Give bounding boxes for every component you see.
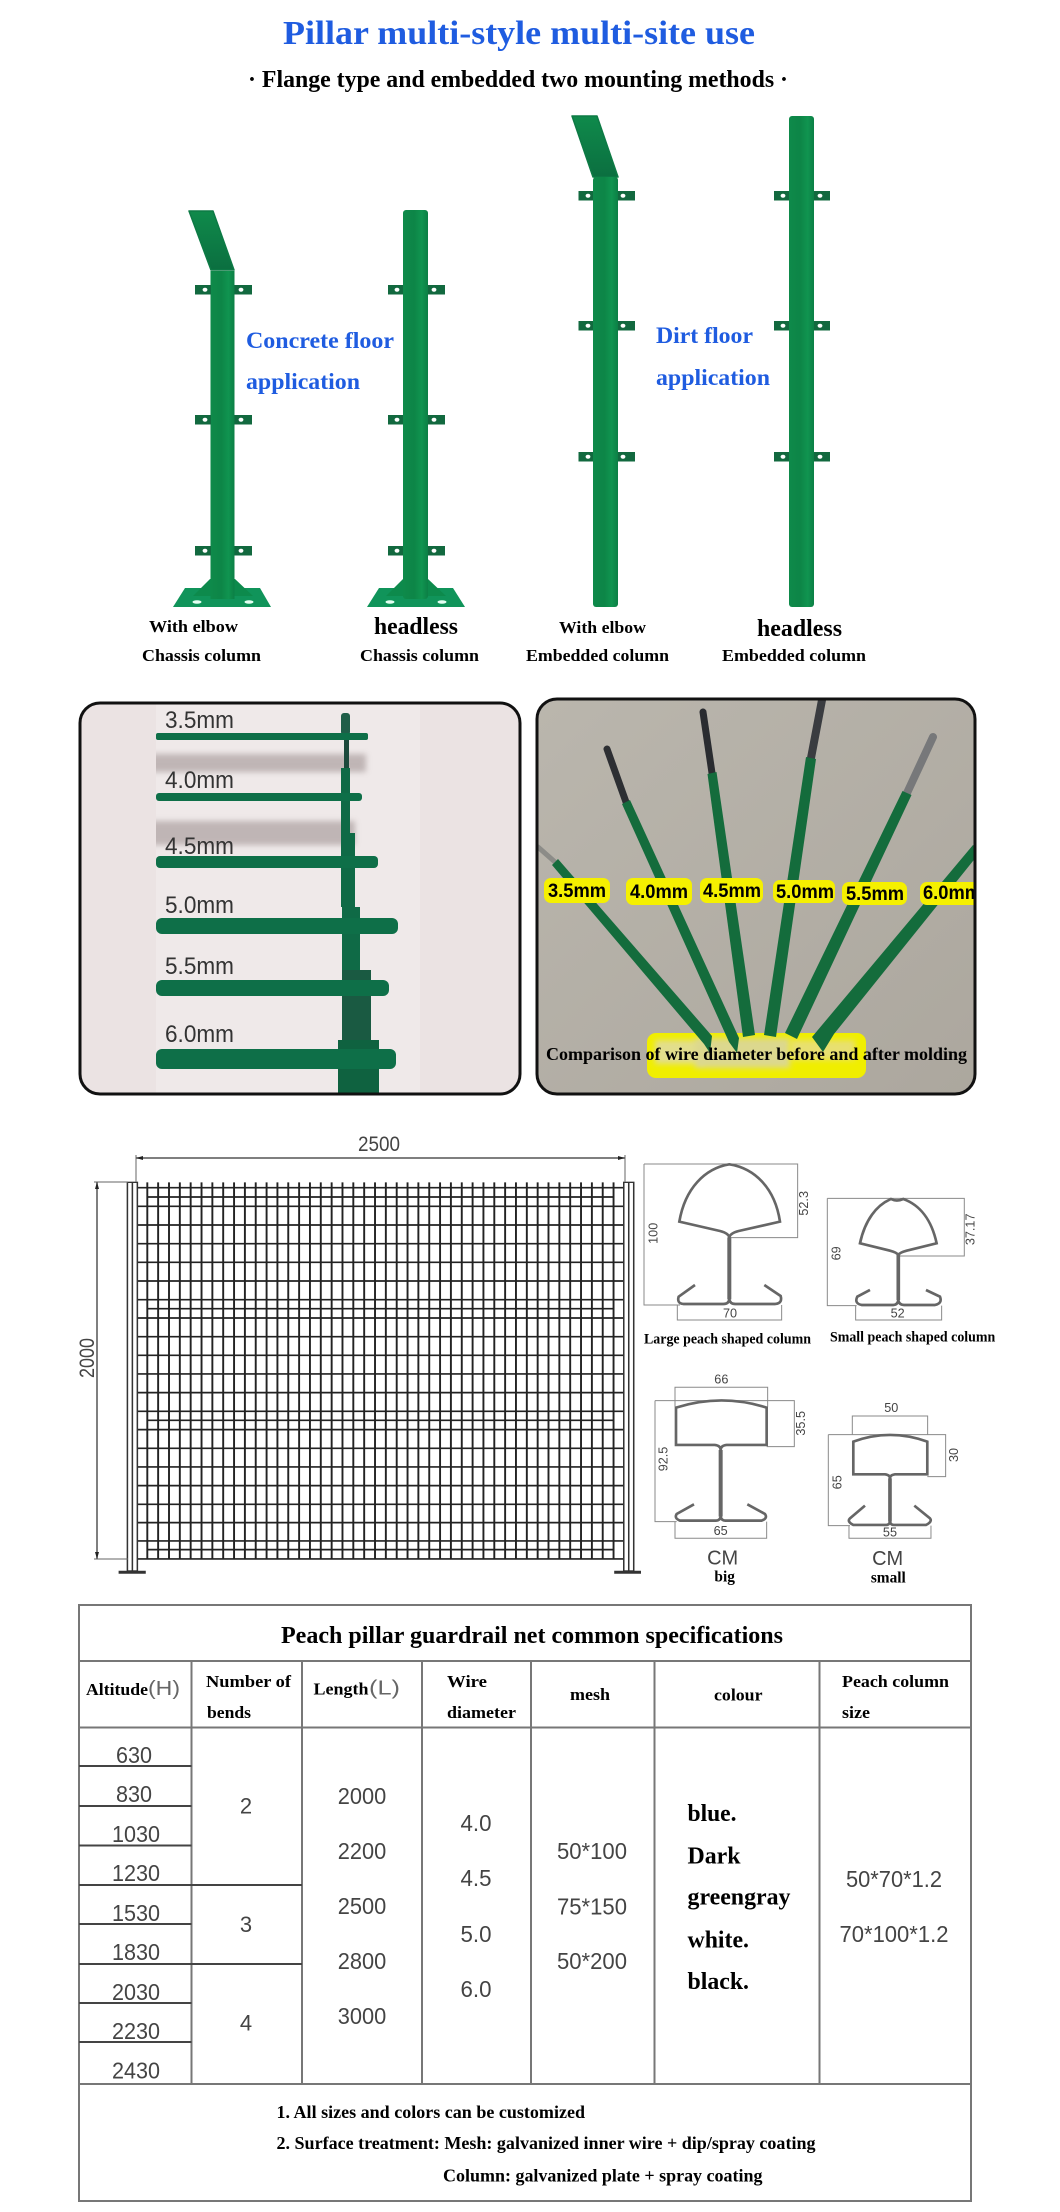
table title: Peach pillar guardrail net common specifications — [281, 1623, 783, 1649]
length column values: 2500 — [338, 1893, 386, 1919]
table header row: Number of — [206, 1672, 291, 1691]
panel: wire comparison before and after molding — [537, 699, 981, 1094]
section: small peach column: 69 — [830, 1246, 844, 1260]
caption: headless embedded column: headless — [757, 616, 842, 642]
altitude column values: 2030 — [112, 1979, 160, 2005]
caption: Comparison of wire diameter before and after molding — [546, 1044, 967, 1064]
table header row: Peach column — [842, 1672, 950, 1691]
green coated wires — [552, 757, 981, 1053]
yellow size tags: 4.0mm — [630, 882, 688, 903]
section: large peach column: 52.3 — [797, 1191, 811, 1216]
height dimension: 2000 — [76, 1338, 99, 1378]
yellow size tags — [544, 878, 981, 905]
column size values: 70*100*1.2 — [840, 1921, 948, 1947]
table header row: diameter — [447, 1703, 516, 1722]
table header row: Altitude — [86, 1680, 148, 1699]
panel: welded wire diameter samples — [80, 703, 520, 1094]
yellow size tags: 4.5mm — [703, 881, 761, 902]
caption: with elbow embedded column: With elbow — [559, 618, 647, 637]
caption: headless chassis column: Chassis column — [360, 646, 480, 665]
caption: with elbow chassis column: With elbow — [149, 617, 239, 636]
length column values: 2200 — [338, 1838, 386, 1864]
altitude column values: 1030 — [112, 1821, 160, 1847]
altitude column values: 2430 — [112, 2058, 160, 2084]
pillar: chassis column with elbow — [173, 211, 271, 607]
wire diameter column values: 5.0 — [460, 1921, 492, 1947]
length column values: 2800 — [338, 1948, 386, 1974]
wire diameter column values — [460, 1810, 492, 2002]
column size values: 50*70*1.2 — [846, 1866, 942, 1892]
length column values — [338, 1783, 386, 2029]
section: CM big column: 35.5 — [794, 1411, 808, 1436]
caption: with elbow embedded column — [526, 618, 670, 665]
table header row: bends — [207, 1703, 251, 1722]
section: CM big column — [655, 1373, 808, 1586]
altitude column values: 1530 — [112, 1900, 160, 1926]
wire size labels: 5.0mm — [165, 892, 234, 919]
section: CM big column: 65 — [714, 1524, 728, 1538]
label: dirt floor application: application — [656, 365, 770, 390]
section: CM small column — [828, 1401, 961, 1586]
label: dirt floor application — [656, 323, 770, 390]
table header row: Length — [314, 1680, 369, 1698]
section: CM big column: big — [714, 1569, 735, 1586]
mesh column values — [557, 1838, 627, 1974]
yellow size tags: 5.5mm — [846, 884, 904, 905]
caption: with elbow chassis column: Chassis column — [142, 646, 262, 665]
section: small peach column: 52 — [891, 1307, 905, 1321]
table header row: colour — [714, 1686, 763, 1704]
altitude column values: 1230 — [112, 1860, 160, 1886]
wire diameter column values: 4.0 — [460, 1810, 492, 1836]
altitude column values: 1830 — [112, 1939, 160, 1965]
mesh column values: 50*100 — [557, 1838, 627, 1864]
width dimension — [136, 1133, 625, 1182]
section: large peach column: 70 — [723, 1307, 737, 1321]
wire size labels: 6.0mm — [165, 1021, 234, 1048]
notes: 1. All sizes and colors can be customized — [276, 2102, 585, 2122]
table header row: (L) — [369, 1678, 400, 1700]
bends column values: 3 — [240, 1912, 252, 1937]
colour column values: blue. — [688, 1801, 736, 1827]
pillar: chassis column headless — [367, 210, 465, 607]
section: CM small column: small — [871, 1569, 906, 1586]
table header row: size — [842, 1703, 870, 1722]
height dimension — [76, 1182, 128, 1559]
colour column values: greengray — [688, 1884, 790, 1910]
wire diameter column values: 6.0 — [460, 1976, 492, 2002]
wire size labels: 4.5mm — [165, 833, 234, 860]
bare wire tips — [538, 700, 933, 862]
yellow size tags: 3.5mm — [548, 881, 606, 902]
pillar: embedded column with elbow — [572, 116, 635, 607]
caption: with elbow chassis column — [142, 617, 262, 665]
section: CM small column: 50 — [884, 1401, 898, 1415]
altitude column values — [112, 1742, 160, 2084]
fence panel dimension drawing — [76, 1133, 641, 1572]
wire size labels: 3.5mm — [165, 707, 234, 734]
mesh column values: 75*150 — [557, 1894, 627, 1920]
section: small peach column — [827, 1198, 995, 1346]
section: CM small column: CM — [872, 1548, 903, 1570]
colour column values: white. — [688, 1928, 749, 1954]
table header row: (H) — [148, 1678, 180, 1700]
section: CM big column: 66 — [714, 1373, 728, 1387]
section: CM small column: 65 — [830, 1475, 844, 1489]
table header row: Wire — [447, 1672, 487, 1691]
colour column values — [688, 1801, 790, 1995]
width dimension: 2500 — [358, 1133, 400, 1156]
title: Pillar multi-style multi-site use — [283, 15, 755, 52]
label: concrete floor application: application — [246, 369, 360, 394]
label: dirt floor application: Dirt floor — [656, 323, 753, 348]
bends column values: 2 — [240, 1794, 252, 1818]
altitude column values: 630 — [116, 1742, 152, 1768]
mesh column values: 50*200 — [557, 1948, 627, 1974]
section: small peach column: 37.17 — [964, 1213, 978, 1245]
fence posts — [119, 1182, 641, 1572]
fence mesh — [137, 1182, 624, 1559]
yellow blob behind caption — [647, 1033, 866, 1078]
bends column values — [240, 1794, 252, 2036]
specification table — [79, 1605, 971, 2201]
colour column values: Dark — [688, 1844, 741, 1870]
caption: with elbow embedded column: Embedded column — [526, 646, 670, 665]
altitude column values: 830 — [116, 1781, 152, 1807]
notes: 2. Surface treatment: Mesh: galvanized inner wire + dip/spray coating — [276, 2133, 816, 2153]
length column values: 2000 — [338, 1783, 386, 1809]
column size values — [840, 1866, 948, 1947]
section: CM small column: 55 — [883, 1525, 897, 1539]
table grid — [79, 1605, 971, 2201]
section: small peach column: Small peach shaped column — [830, 1330, 995, 1346]
panel: pillar types — [142, 116, 867, 665]
altitude column values: 2230 — [112, 2018, 160, 2044]
caption: headless chassis column — [360, 614, 480, 665]
wire size labels: 4.0mm — [165, 767, 234, 794]
caption: headless embedded column: Embedded column — [722, 646, 867, 665]
notes: Column: galvanized plate + spray coating — [443, 2166, 762, 2186]
pillar: embedded column headless — [774, 116, 830, 607]
bends column values: 4 — [240, 2010, 252, 2036]
cross sections — [644, 1164, 995, 1586]
section: large peach column: 100 — [646, 1223, 660, 1244]
caption: headless chassis column: headless — [374, 614, 458, 640]
table header row — [86, 1672, 950, 1722]
section: large peach column: Large peach shaped column — [644, 1332, 811, 1348]
vertical wire — [338, 713, 379, 1094]
yellow size tags: 6.0mm — [923, 883, 981, 904]
wire diameter column values: 4.5 — [460, 1865, 492, 1891]
label: concrete floor application — [246, 328, 394, 394]
notes — [276, 2102, 816, 2186]
length column values: 3000 — [338, 2003, 386, 2029]
section: CM big column: CM — [707, 1547, 738, 1569]
section: large peach column — [644, 1164, 811, 1348]
table header row: mesh — [570, 1685, 611, 1704]
label: concrete floor application: Concrete floor — [246, 328, 394, 353]
section: CM small column: 30 — [947, 1448, 961, 1462]
horizontal wires — [156, 733, 398, 1069]
subtitle: · Flange type and embedded two mounting methods · — [248, 67, 788, 93]
colour column values: black. — [688, 1969, 749, 1995]
wire size labels — [165, 707, 234, 1048]
caption: headless embedded column — [722, 616, 867, 665]
section: CM big column: 92.5 — [656, 1447, 670, 1471]
wire size labels: 5.5mm — [165, 953, 234, 980]
yellow size tags: 5.0mm — [776, 882, 834, 903]
